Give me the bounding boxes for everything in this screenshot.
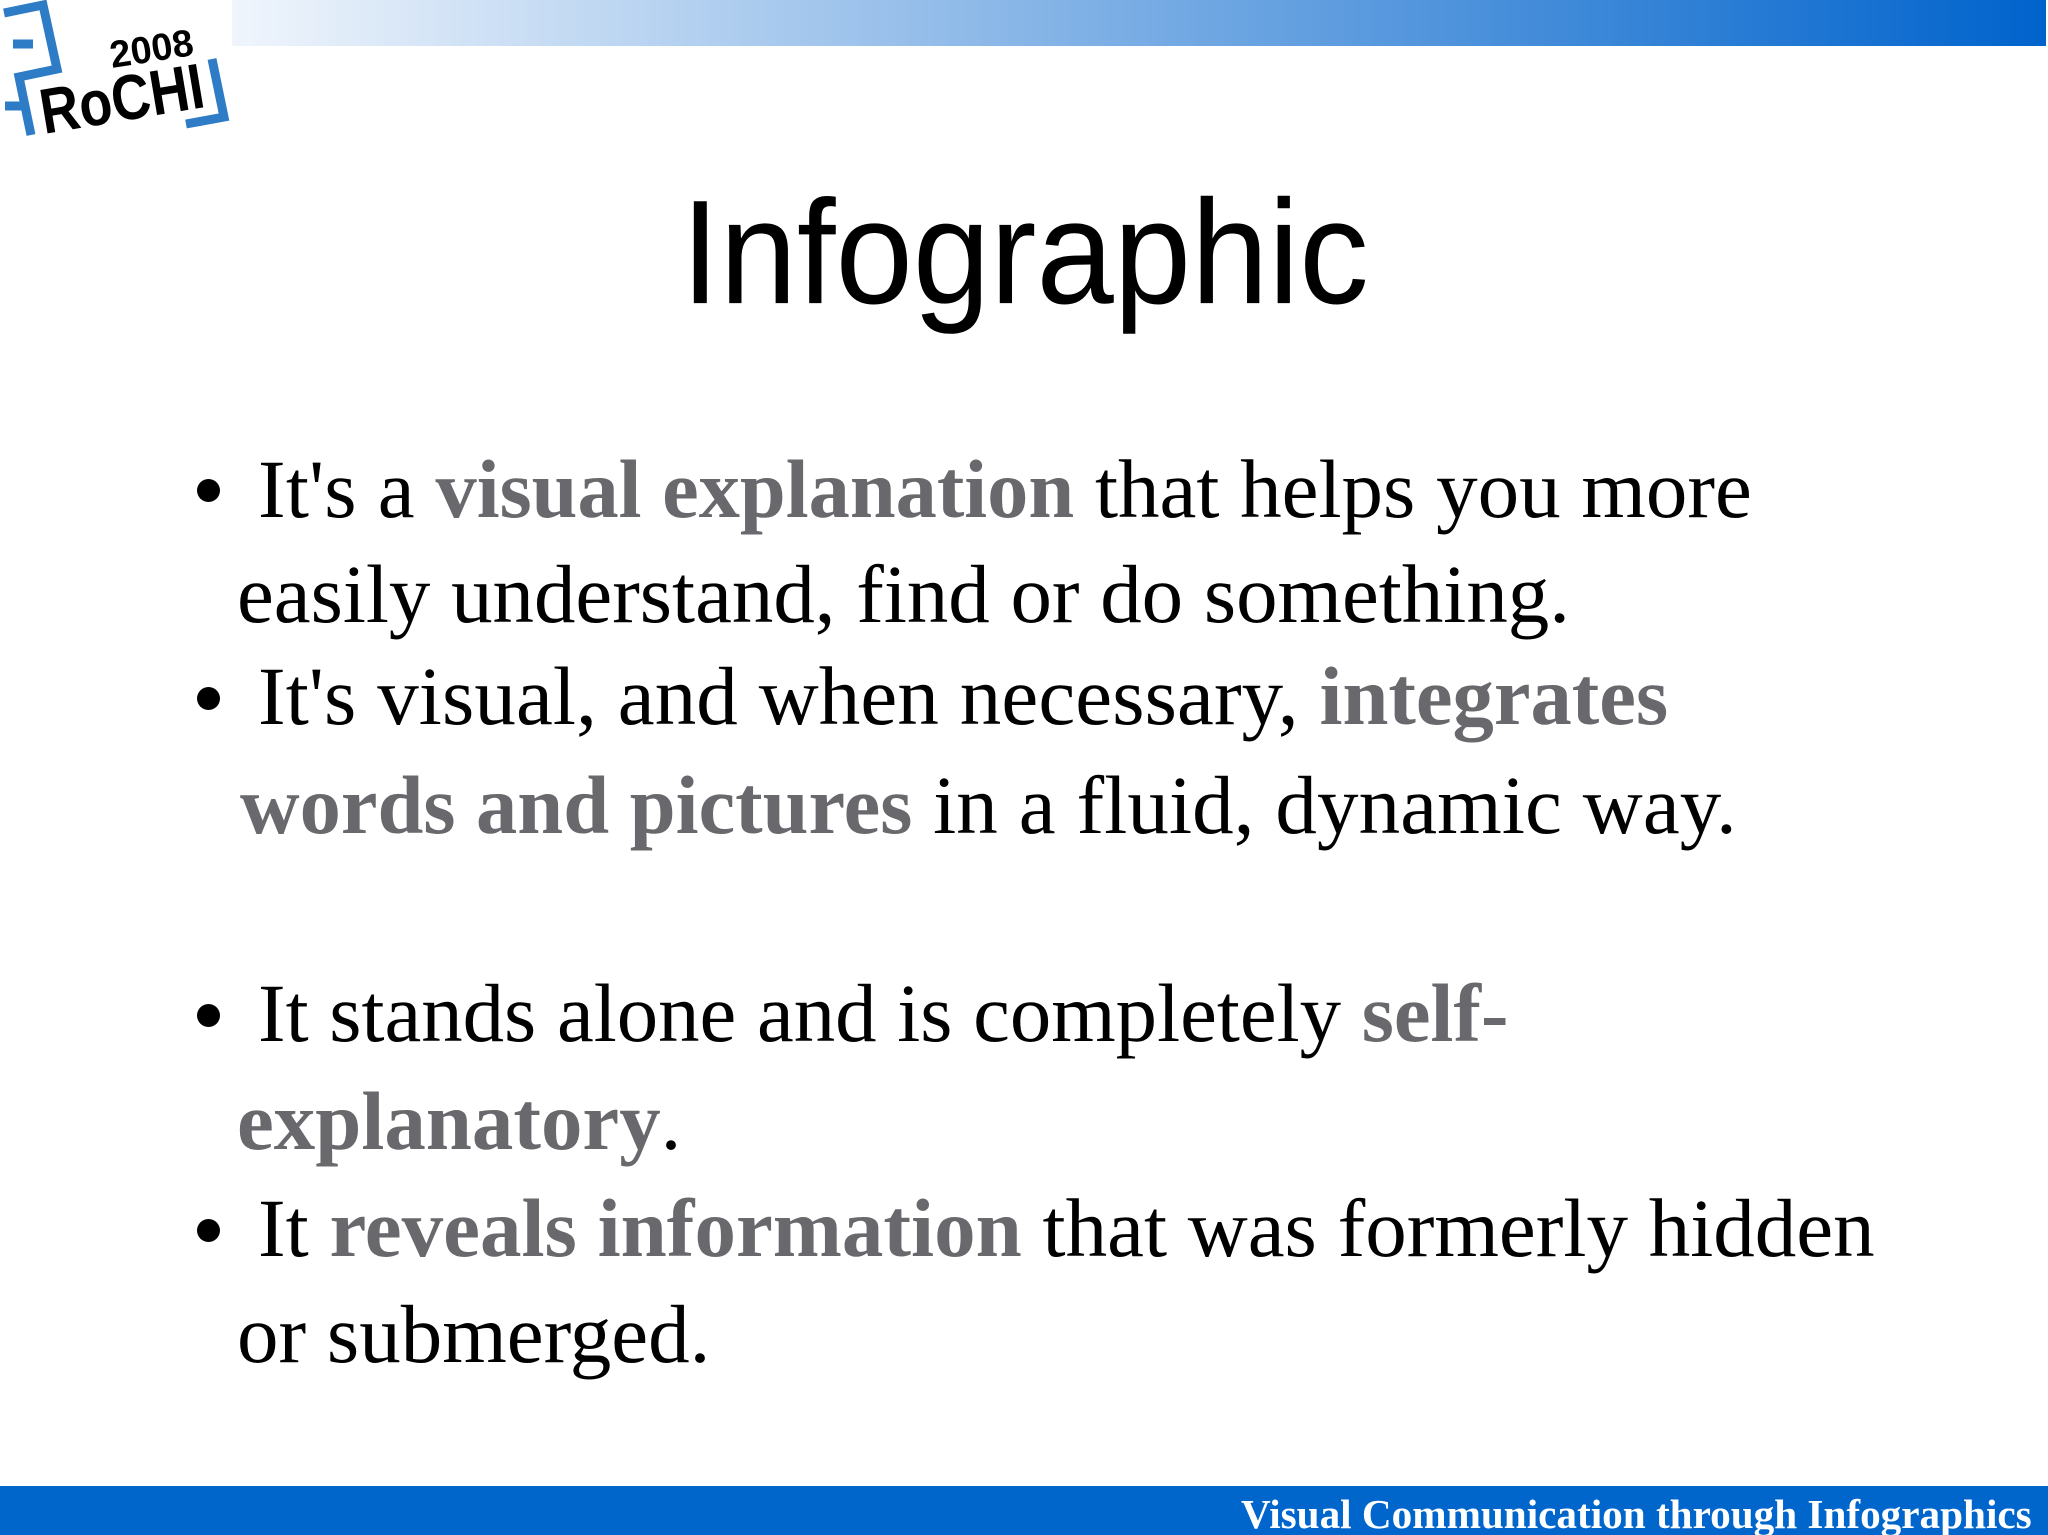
logo year: 2008 xyxy=(107,22,196,77)
bullet 1 text line 1: It's a visual explanation that helps you more xyxy=(258,443,1752,535)
bullet 3 dot xyxy=(197,1004,220,1027)
bullet 4 dot xyxy=(197,1219,220,1242)
bullet 2 text line 2: words and pictures in a fluid, dynamic way. xyxy=(240,759,1737,851)
title: Infographic xyxy=(681,170,1369,335)
bullet 4 text line 2: or submerged. xyxy=(237,1288,710,1380)
logo bracket: left xyxy=(4,5,57,135)
logo: RoCHI 2008 xyxy=(3,0,230,140)
logo dash marks xyxy=(5,44,33,106)
bullet 4 text line 1: It reveals information that was formerly hidden xyxy=(258,1182,1875,1274)
bullet 2 dot xyxy=(197,687,220,710)
logo bracket: right xyxy=(186,59,224,124)
footer bar xyxy=(0,1486,2048,1535)
top gradient band xyxy=(232,0,2046,46)
bullet 3 text line 2: explanatory. xyxy=(237,1075,681,1167)
bullet 2 text line 1: It's visual, and when necessary, integrates xyxy=(258,650,1668,742)
bullet 3 text line 1: It stands alone and is completely self- xyxy=(258,967,1508,1059)
bullet 1 text line 2: easily understand, find or do something. xyxy=(237,548,1570,640)
bullet 1 dot xyxy=(197,479,220,502)
